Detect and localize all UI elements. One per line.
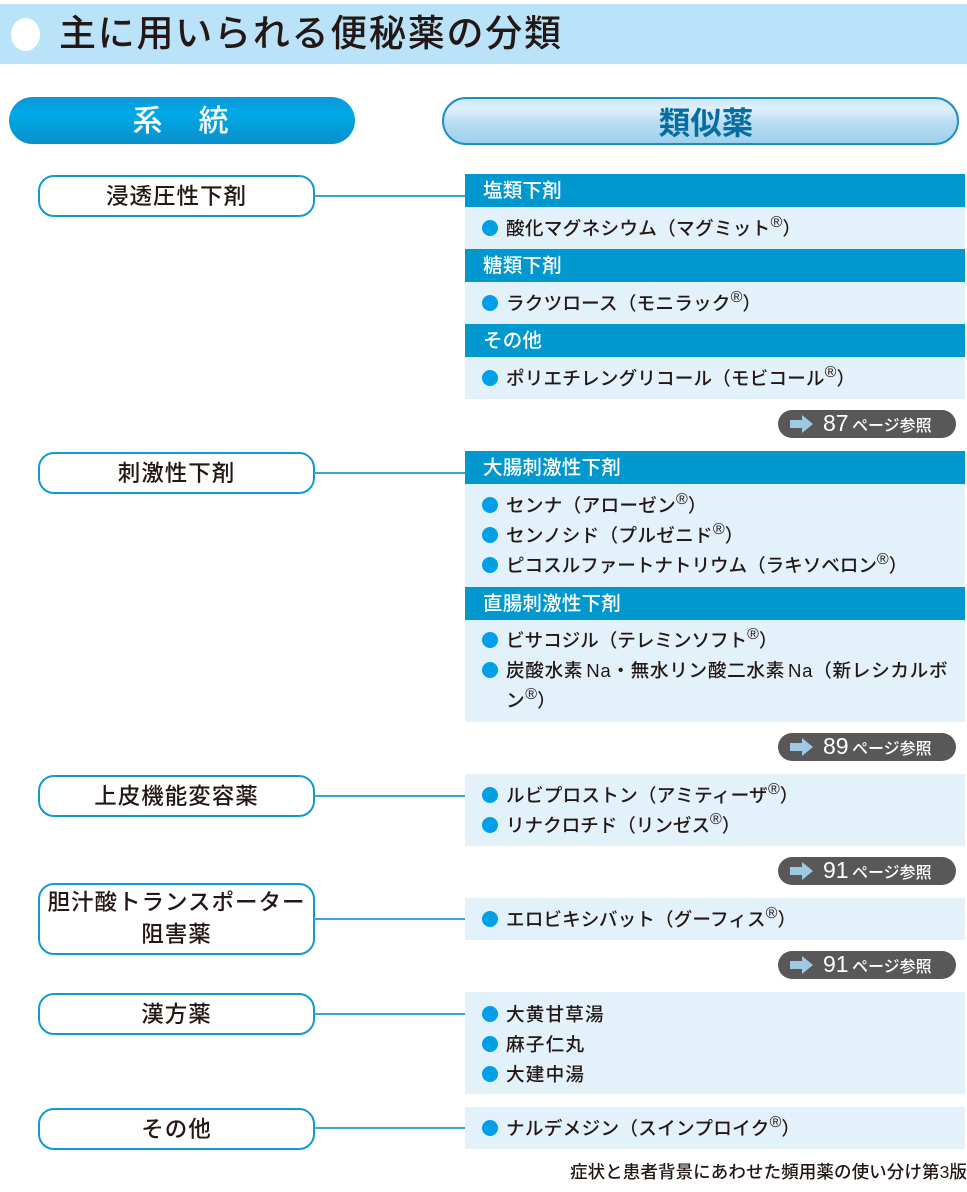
drug item: ポリエチレングリコール（モビコール®） (506, 364, 855, 389)
system box: 刺激性下剤: 刺激性下剤 (118, 461, 235, 486)
drug item: リナクロチド（リンゼス®） (506, 811, 740, 836)
panel: 上皮機能変容薬 drugs (465, 774, 965, 846)
system box: 漢方薬 (38, 993, 315, 1035)
page reference: 87: 87 (823, 410, 849, 436)
drug item: ピコスルファートナトリウム（ラキソベロン®） (506, 551, 907, 576)
connector line (314, 1013, 465, 1015)
heading pill: 類似薬 (442, 97, 959, 145)
page reference: 89 (778, 733, 956, 761)
heading pill: 系統: 系 統 (132, 105, 232, 138)
drug item: 炭酸水素Na・無水リン酸二水素Na（新レシカルボ (506, 660, 948, 681)
header: 塩類下剤: 塩類下剤 (483, 180, 562, 202)
drug item: エロビキシバット（グーフィス®） (506, 905, 796, 930)
page reference: 87: ページ参照 (852, 418, 932, 435)
page reference: 91: 91 (823, 857, 849, 883)
system box: その他 (38, 1108, 315, 1150)
header: 糖類下剤: 糖類下剤 (483, 255, 562, 277)
drug item: 大黄甘草湯 (506, 1004, 605, 1025)
page reference: 91 (778, 857, 956, 885)
heading pill: 類似薬: 類似薬 (659, 105, 753, 141)
header: 直腸刺激性下剤: 直腸刺激性下剤 (483, 593, 621, 615)
system box: 胆汁酸トランスポーター阻害薬: 阻害薬 (141, 922, 212, 947)
panel: 塩類下剤 drugs (465, 207, 965, 249)
system box: 浸透圧性下剤 (38, 175, 315, 217)
drug item (482, 660, 948, 711)
drug item: ビサコジル（テレミンソフト®） (506, 626, 777, 651)
title banner (0, 4, 967, 64)
connector line (314, 472, 465, 474)
drug item: センノシド（プルゼニド®） (506, 521, 744, 546)
page reference: 91: ページ参照 (852, 959, 932, 976)
header: 塩類下剤 (465, 174, 965, 207)
drug item: センナ（アローゼン®） (506, 491, 707, 516)
connector line (314, 1127, 465, 1129)
header: 糖類下剤 (465, 249, 965, 282)
drug item: ン®） (506, 686, 556, 711)
source note: 症状と患者背景にあわせた頻用薬の使い分け第3版 (570, 1162, 967, 1182)
drug item: ルビプロストン（アミティーザ®） (506, 781, 799, 806)
header: 大腸刺激性下剤 (465, 451, 965, 484)
heading pill: 系統 (9, 97, 355, 144)
header: 直腸刺激性下剤 (465, 587, 965, 620)
system box: その他: その他 (141, 1117, 212, 1142)
header: 大腸刺激性下剤: 大腸刺激性下剤 (483, 457, 621, 479)
connector line (314, 918, 465, 920)
page reference: 89: 89 (823, 733, 849, 759)
panel: 漢方薬 drugs (465, 992, 965, 1094)
system box: 上皮機能変容薬 (38, 775, 315, 817)
page reference: 91: ページ参照 (852, 865, 932, 882)
page reference: 91: 91 (823, 951, 849, 977)
drug item: ナルデメジン（スインプロイク®） (506, 1114, 800, 1139)
connector line (314, 795, 465, 797)
icon: white circle (11, 18, 40, 51)
panel: 糖類下剤 drugs (465, 282, 965, 324)
panel: その他 drugs (465, 357, 965, 399)
system box: 浸透圧性下剤: 浸透圧性下剤 (106, 184, 247, 209)
drug item: 麻子仁丸 (506, 1034, 585, 1055)
panel: その他 drugs (465, 1107, 965, 1149)
system box: 胆汁酸トランスポーター阻害薬: 胆汁酸トランスポーター (47, 890, 306, 915)
header: その他: その他 (483, 330, 542, 352)
system box: 漢方薬: 漢方薬 (141, 1002, 212, 1027)
drug item: 酸化マグネシウム（マグミット®） (506, 214, 801, 239)
header: その他 (465, 324, 965, 357)
panel: 胆汁酸トランスポーター阻害薬 drugs (465, 898, 965, 940)
page reference: 91 (778, 951, 956, 979)
page reference: 87 (778, 410, 956, 438)
system box: 刺激性下剤 (38, 452, 315, 494)
system box: 上皮機能変容薬: 上皮機能変容薬 (94, 784, 259, 809)
title: 主に用いられる便秘薬の分類 (59, 13, 563, 54)
system box: 胆汁酸トランスポーター阻害薬 (38, 883, 315, 955)
drug item: ラクツロース（モニラック®） (506, 289, 761, 314)
panel: 大腸刺激性下剤 drugs (465, 484, 965, 587)
panel: 直腸刺激性下剤 drugs (465, 620, 965, 722)
connector line (314, 195, 465, 197)
page reference: 89: ページ参照 (852, 741, 932, 758)
drug item: 大建中湯 (506, 1064, 585, 1085)
